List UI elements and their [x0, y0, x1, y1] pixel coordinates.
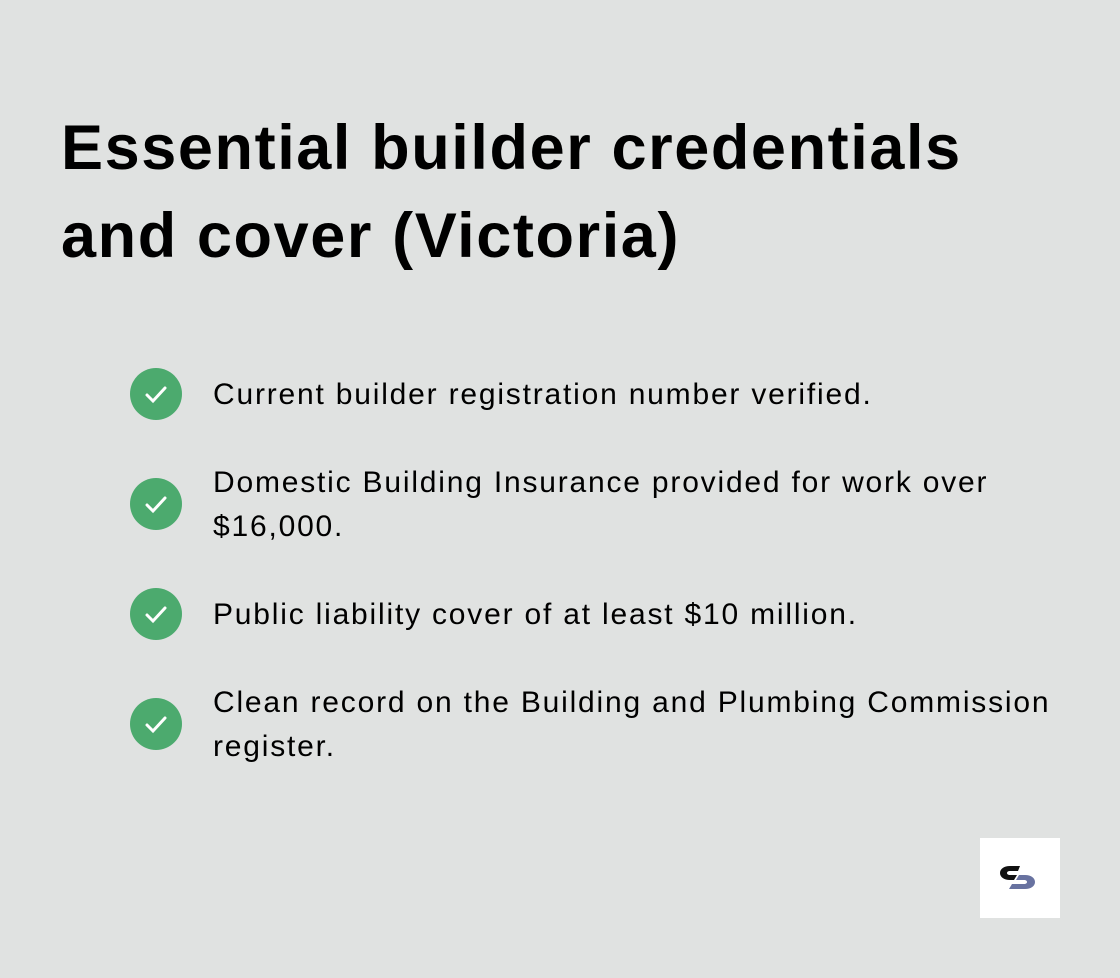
title: and cover (Victoria)	[61, 201, 680, 271]
title: Essential builder credentials	[61, 113, 962, 183]
icon: check	[130, 478, 182, 530]
item 4	[130, 686, 1050, 763]
item 2	[130, 466, 988, 543]
text	[213, 686, 1050, 763]
text: Public liability cover of at least $10 million.	[213, 598, 858, 631]
item 3	[130, 588, 858, 640]
text: Current builder registration number verified.	[213, 378, 873, 411]
logo	[980, 838, 1060, 918]
text	[213, 466, 988, 543]
item 1	[130, 368, 873, 420]
icon: check	[130, 368, 182, 420]
text: Clean record on the Building and Plumbing Commission	[213, 686, 1050, 719]
icon: check	[130, 698, 182, 750]
icon: check	[130, 588, 182, 640]
text: Domestic Building Insurance provided for work over	[213, 466, 988, 499]
text: $16,000.	[213, 510, 344, 543]
text: register.	[213, 730, 336, 763]
title	[61, 113, 962, 271]
